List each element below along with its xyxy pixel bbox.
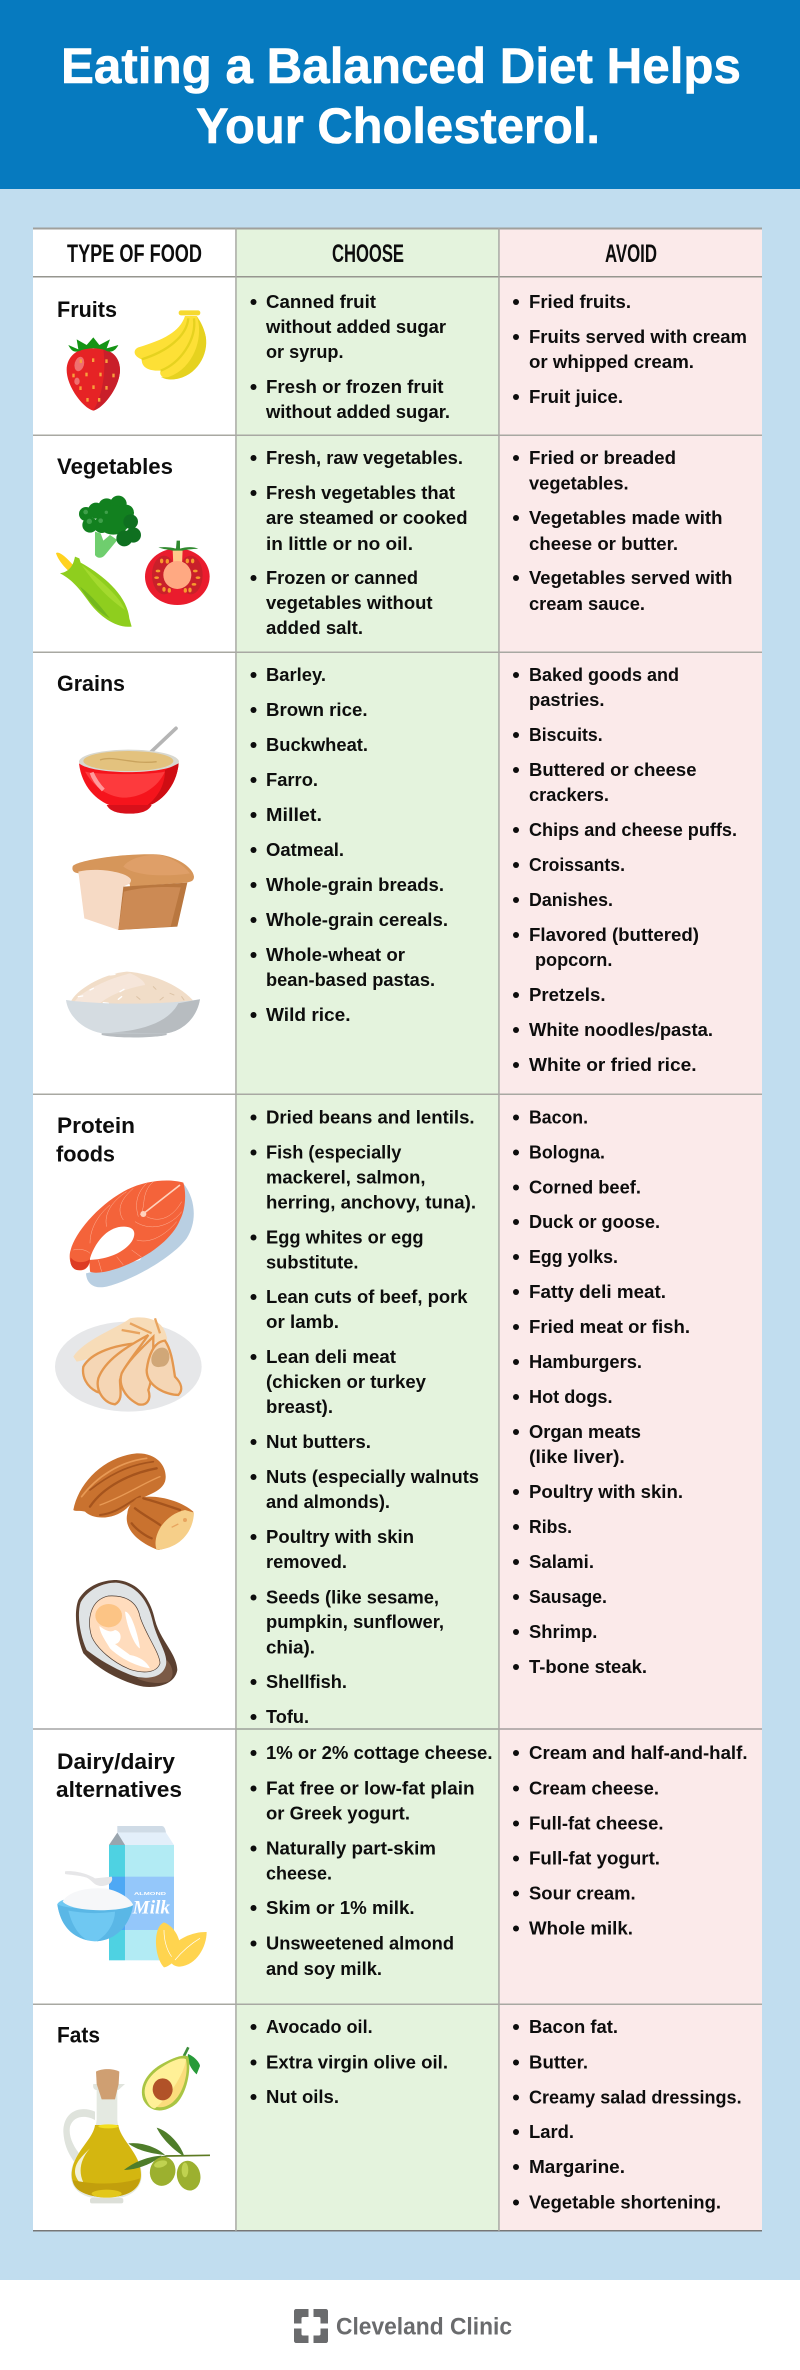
column: fruits avoid: Fruit juice. xyxy=(529,386,623,407)
column: dairy avoid: Sour cream. xyxy=(529,1882,636,1904)
column: protein choose: (chicken or turkey xyxy=(266,1371,427,1392)
column: protein avoid: Hot dogs. xyxy=(529,1386,612,1407)
column: protein avoid: (like liver). xyxy=(529,1446,625,1467)
column: dairy choose: Fat free or low-fat plain xyxy=(266,1778,475,1798)
column: grains avoid: Danishes. xyxy=(529,889,613,910)
table header row: TYPE OF FOOD xyxy=(67,240,202,268)
title banner: Eating a Balanced Diet Helps xyxy=(61,38,741,94)
column: protein choose: Poultry with skin xyxy=(266,1526,414,1547)
column: vegetables choose xyxy=(236,435,499,652)
column: vegetables avoid: Vegetables served with xyxy=(529,567,732,588)
icon: corn xyxy=(56,553,132,627)
column: protein avoid: Salami. xyxy=(529,1551,594,1572)
label: vegetables: Vegetables xyxy=(57,454,173,479)
icon: loaf of bread xyxy=(72,854,194,930)
column: protein avoid: Ribs. xyxy=(529,1516,572,1537)
column: grains avoid: Flavored (buttered) xyxy=(529,924,699,945)
label: dairy alternatives: Dairy/dairy xyxy=(57,1749,176,1774)
column: protein choose: removed. xyxy=(266,1551,347,1572)
label: grains: Grains xyxy=(57,671,125,696)
column: protein choose: Lean cuts of beef, pork xyxy=(266,1286,468,1307)
column: grains choose: Barley. xyxy=(266,664,326,685)
column: protein avoid: Shrimp. xyxy=(529,1621,597,1642)
icon: almond milk carton: Milk xyxy=(132,1897,170,1918)
column: fats avoid: Creamy salad dressings. xyxy=(529,2086,742,2108)
column: fats choose: Extra virgin olive oil. xyxy=(266,2052,448,2072)
column: protein choose xyxy=(236,1094,499,1729)
icon: olive oil jug xyxy=(63,2069,142,2203)
table header row: CHOOSE xyxy=(332,240,404,268)
icon: sliced chicken on plate xyxy=(55,1317,202,1412)
column: protein choose: pumpkin, sunflower, xyxy=(266,1611,444,1632)
column: protein choose: substitute. xyxy=(266,1252,358,1272)
icon: broccoli xyxy=(79,496,141,558)
column: dairy choose: Unsweetened almond xyxy=(266,1932,454,1954)
icon: Cleveland Clinic cross xyxy=(294,2309,328,2343)
column: protein choose: mackerel, salmon, xyxy=(266,1166,426,1188)
column: grains choose: Millet. xyxy=(266,804,322,825)
column: vegetables avoid: Fried or breaded xyxy=(529,447,676,468)
icon: almond milk carton xyxy=(109,1826,174,1960)
table header row: AVOID xyxy=(605,240,657,268)
column: fats choose: Avocado oil. xyxy=(266,2016,373,2037)
column: grains avoid: crackers. xyxy=(529,784,609,805)
column: dairy choose: 1% or 2% cottage cheese. xyxy=(266,1742,492,1763)
icon: strawberry xyxy=(67,337,120,411)
column: dairy avoid: Full-fat yogurt. xyxy=(529,1848,660,1868)
column: protein avoid: Fatty deli meat. xyxy=(529,1281,666,1302)
column: grains choose: Whole-grain cereals. xyxy=(266,909,448,930)
title banner: Your Cholesterol. xyxy=(196,98,600,154)
column: grains avoid: Chips and cheese puffs. xyxy=(529,819,737,840)
column: vegetables avoid: vegetables. xyxy=(529,472,629,494)
column: fats avoid: Margarine. xyxy=(529,2156,625,2177)
column: protein choose: chia). xyxy=(266,1636,315,1658)
column: grains choose: Wild rice. xyxy=(266,1004,350,1025)
icon: bowl of rice xyxy=(66,972,200,1037)
column: grains avoid: Biscuits. xyxy=(529,724,603,745)
label: fats: Fats xyxy=(57,2022,100,2048)
column: dairy choose: Skim or 1% milk. xyxy=(266,1897,415,1918)
row: fats xyxy=(33,2004,236,2231)
column: protein choose: Fish (especially xyxy=(266,1142,402,1162)
column: fats avoid: Lard. xyxy=(529,2121,574,2142)
column: dairy choose: cheese. xyxy=(266,1862,332,1884)
column: protein choose: Dried beans and lentils. xyxy=(266,1106,475,1128)
column: protein avoid: Hamburgers. xyxy=(529,1351,642,1372)
column: grains choose: Brown rice. xyxy=(266,699,368,720)
column: fruits avoid: Fruits served with cream xyxy=(529,326,747,347)
column: protein avoid: Bacon. xyxy=(529,1106,588,1128)
column: grains avoid: Buttered or cheese xyxy=(529,759,696,780)
column: protein choose: Seeds (like sesame, xyxy=(266,1586,439,1608)
column: protein choose: breast). xyxy=(266,1396,333,1417)
column: grains avoid: Baked goods and xyxy=(529,664,679,685)
footer logo: Cleveland Clinic: Cleveland Clinic xyxy=(336,2314,512,2340)
icon: salmon steak xyxy=(70,1180,194,1287)
column: fats choose xyxy=(236,2004,499,2231)
column: dairy avoid: Full-fat cheese. xyxy=(529,1812,664,1834)
icon: avocado xyxy=(142,2047,200,2110)
column: dairy choose: Naturally part-skim xyxy=(266,1838,436,1858)
column: dairy choose: and soy milk. xyxy=(266,1958,382,1979)
icon: red bowl of oatmeal xyxy=(79,728,179,814)
column: protein choose: and almonds). xyxy=(266,1491,390,1512)
label: protein foods xyxy=(56,1113,135,1166)
icon: banana xyxy=(135,310,206,379)
column: dairy avoid: Cream and half-and-half. xyxy=(529,1742,748,1763)
icon: tomato xyxy=(145,541,210,605)
column: protein avoid: T-bone steak. xyxy=(529,1656,647,1677)
column: grains choose: bean-based pastas. xyxy=(266,969,435,990)
icon: almonds xyxy=(73,1453,194,1550)
column: protein avoid: Bologna. xyxy=(529,1142,605,1162)
label: fruits: Fruits xyxy=(57,297,117,322)
column: grains avoid: pastries. xyxy=(529,689,604,710)
column: grains avoid: White or fried rice. xyxy=(529,1054,696,1075)
column: vegetables choose: Fresh, raw vegetables. xyxy=(266,447,463,468)
column: grains choose: Farro. xyxy=(266,769,318,790)
column: dairy avoid xyxy=(499,1729,762,2004)
column: fruits avoid: or whipped cream. xyxy=(529,351,694,372)
column: vegetables avoid: cheese or butter. xyxy=(529,533,678,554)
row: vegetables xyxy=(33,435,236,652)
column: fruits avoid xyxy=(499,277,762,435)
footer logo: Cleveland Clinic xyxy=(294,2309,512,2343)
column: fruits choose: without added sugar. xyxy=(265,401,450,422)
label: protein foods: foods xyxy=(56,1142,115,1166)
icon: oyster xyxy=(76,1580,177,1687)
column: fruits avoid: Fried fruits. xyxy=(529,291,631,312)
column: grains avoid: Croissants. xyxy=(529,854,625,875)
icon: olive branch xyxy=(124,2128,210,2193)
column: protein choose: herring, anchovy, tuna). xyxy=(266,1192,476,1212)
label: dairy alternatives xyxy=(56,1749,182,1802)
column: fats choose: Nut oils. xyxy=(266,2086,339,2107)
label: protein foods: Protein xyxy=(57,1113,135,1138)
column: dairy choose xyxy=(236,1729,499,2004)
column: vegetables choose: vegetables without xyxy=(266,592,433,613)
column: protein avoid: Corned beef. xyxy=(529,1176,641,1198)
label: dairy alternatives: alternatives xyxy=(56,1777,182,1802)
column: fruits choose xyxy=(236,277,499,435)
row: fruits xyxy=(33,277,236,435)
column: protein avoid: Sausage. xyxy=(529,1586,607,1607)
column: grains choose: Oatmeal. xyxy=(266,839,344,860)
column: fruits choose: without added sugar xyxy=(265,316,446,337)
column: dairy choose: or Greek yogurt. xyxy=(266,1802,410,1824)
column: grains choose xyxy=(236,652,499,1094)
column: vegetables avoid xyxy=(499,435,762,652)
column: protein avoid: Duck or goose. xyxy=(529,1211,660,1232)
row: protein foods xyxy=(33,1094,236,1729)
column: protein choose: Nuts (especially walnuts xyxy=(266,1466,479,1487)
column: protein choose: or lamb. xyxy=(266,1311,339,1332)
column: fats avoid: Butter. xyxy=(529,2052,588,2072)
column: protein choose: Shellfish. xyxy=(266,1671,347,1692)
column: vegetables choose: are steamed or cooked xyxy=(266,507,468,528)
column: vegetables choose: added salt. xyxy=(266,617,363,638)
column: grains avoid: White noodles/pasta. xyxy=(529,1019,713,1040)
column: fruits choose: or syrup. xyxy=(266,341,344,362)
column: fats avoid xyxy=(499,2004,762,2231)
column: vegetables avoid: Vegetables made with xyxy=(529,507,722,528)
column: grains choose: Whole-grain breads. xyxy=(266,874,444,895)
row: dairy xyxy=(33,1729,236,2004)
column: protein choose: Lean deli meat xyxy=(266,1346,396,1367)
icon: bowl of yogurt xyxy=(57,1871,133,1941)
column: grains choose: Whole-wheat or xyxy=(266,944,405,965)
column: vegetables avoid: cream sauce. xyxy=(529,593,645,614)
column: fats avoid: Bacon fat. xyxy=(529,2016,618,2037)
table header row xyxy=(33,228,762,277)
column: grains avoid xyxy=(499,652,762,1094)
column: dairy avoid: Whole milk. xyxy=(529,1918,633,1938)
column: protein avoid: Fried meat or fish. xyxy=(529,1316,690,1337)
column: protein avoid: Egg yolks. xyxy=(529,1246,618,1267)
column: vegetables choose: Fresh vegetables that xyxy=(266,482,455,503)
title banner xyxy=(0,0,800,189)
column: vegetables choose: Frozen or canned xyxy=(266,567,418,588)
row: grains xyxy=(33,652,236,1094)
column: grains avoid: popcorn. xyxy=(535,949,612,970)
column: grains avoid: Pretzels. xyxy=(529,984,606,1005)
column: fats avoid: Vegetable shortening. xyxy=(529,2192,721,2212)
column: protein choose: Tofu. xyxy=(266,1706,309,1727)
column: vegetables choose: in little or no oil. xyxy=(266,533,413,554)
column: protein choose: Nut butters. xyxy=(266,1431,371,1452)
column: protein avoid: Poultry with skin. xyxy=(529,1481,683,1502)
icon: almonds yellow xyxy=(156,1922,207,1967)
column: grains choose: Buckwheat. xyxy=(266,734,368,755)
column: dairy avoid: Cream cheese. xyxy=(529,1778,659,1798)
column: protein avoid: Organ meats xyxy=(529,1421,641,1442)
column: protein avoid xyxy=(499,1094,762,1729)
column: fruits choose: Fresh or frozen fruit xyxy=(266,376,444,397)
column: protein choose: Egg whites or egg xyxy=(266,1226,424,1248)
column: fruits choose: Canned fruit xyxy=(266,291,376,312)
icon: almond milk carton: ALMOND xyxy=(134,1891,167,1897)
